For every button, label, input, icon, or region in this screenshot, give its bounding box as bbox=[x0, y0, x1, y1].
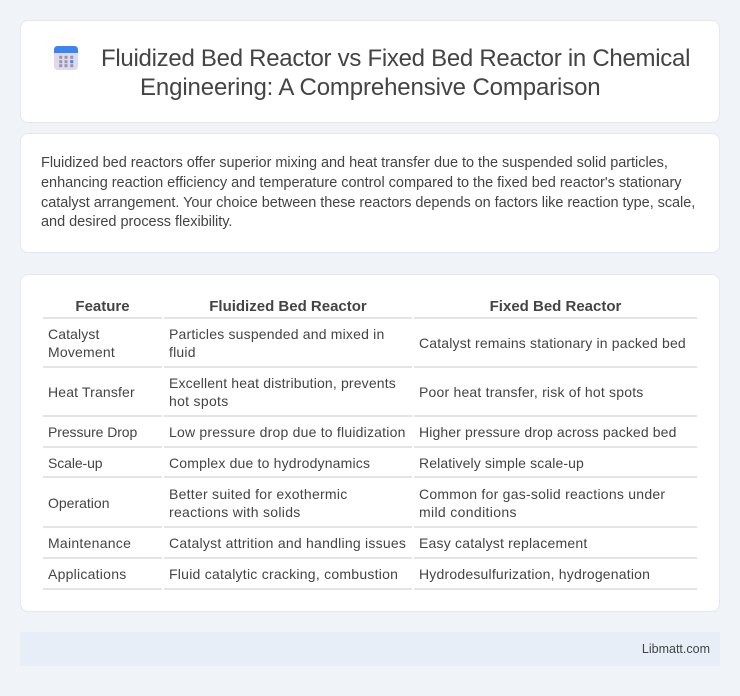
row: Scale-up: Relatively simple scale-up bbox=[419, 455, 584, 471]
row: Pressure Drop bbox=[43, 424, 697, 448]
header row: Fluidized Bed Reactor bbox=[209, 298, 367, 315]
title: Fluidized Bed Reactor vs Fixed Bed Reactor in Chemical bbox=[101, 45, 690, 72]
row: Maintenance: Maintenance bbox=[48, 535, 131, 551]
row: Applications: Hydrodesulfurization, hydrogenation bbox=[419, 566, 650, 582]
row: Catalyst Movement: Catalyst remains stationary in packed bed bbox=[419, 335, 686, 351]
row: Maintenance: Catalyst attrition and handling issues bbox=[169, 535, 406, 551]
row: Applications: Fluid catalytic cracking, combustion bbox=[169, 566, 398, 582]
row: Scale-up: Scale-up bbox=[48, 455, 102, 471]
row: Operation: mild conditions bbox=[419, 504, 517, 520]
row: Pressure Drop: Low pressure drop due to fluidization bbox=[169, 424, 406, 440]
text block: summary: catalyst arrangement. Your choice between these reactors depends on factors like reaction type, scale, bbox=[41, 195, 695, 211]
row: Operation: Better suited for exothermic bbox=[169, 486, 347, 502]
header row: Fixed Bed Reactor bbox=[490, 298, 621, 315]
icon: calendar bbox=[54, 46, 78, 70]
footer text: Libmatt.com bbox=[642, 642, 710, 656]
text block: summary bbox=[41, 155, 695, 230]
row: Applications bbox=[43, 566, 697, 590]
row: Scale-up bbox=[43, 455, 697, 478]
panel: summary card bbox=[20, 133, 720, 253]
row: Catalyst Movement: Movement bbox=[48, 344, 115, 360]
row: Scale-up: Complex due to hydrodynamics bbox=[169, 455, 370, 471]
row: Heat Transfer bbox=[43, 375, 697, 417]
row: Operation: Operation bbox=[48, 495, 109, 511]
row: Pressure Drop: Pressure Drop bbox=[48, 424, 137, 440]
header row: Feature bbox=[75, 298, 130, 315]
row: Pressure Drop: Higher pressure drop across packed bed bbox=[419, 424, 676, 440]
text block: summary: Fluidized bed reactors offer superior mixing and heat transfer due to the suspended solid particles, bbox=[41, 155, 668, 171]
row: Operation: Common for gas-solid reactions under bbox=[419, 486, 665, 502]
row: Catalyst Movement bbox=[43, 326, 697, 368]
row: Catalyst Movement: Particles suspended and mixed in bbox=[169, 326, 384, 342]
text block: summary: and desired process flexibility. bbox=[41, 214, 232, 230]
comparison table bbox=[43, 298, 697, 590]
title: Engineering: A Comprehensive Comparison bbox=[140, 74, 601, 101]
title bbox=[101, 45, 690, 101]
row: Heat Transfer: Excellent heat distribution, prevents bbox=[169, 375, 396, 391]
row: Maintenance: Easy catalyst replacement bbox=[419, 535, 587, 551]
row: Heat Transfer: Heat Transfer bbox=[48, 384, 135, 400]
header row bbox=[43, 298, 697, 319]
row: Operation bbox=[43, 486, 697, 528]
row: Operation: reactions with solids bbox=[169, 504, 301, 520]
row: Catalyst Movement: Catalyst bbox=[48, 326, 100, 342]
row: Heat Transfer: Poor heat transfer, risk of hot spots bbox=[419, 384, 644, 400]
text block: summary: enhancing reaction efficiency and temperature control compared to the fixed bed reactor's stationary bbox=[41, 175, 681, 191]
panel: title card bbox=[20, 20, 720, 123]
row: Heat Transfer: hot spots bbox=[169, 393, 229, 409]
row: Applications: Applications bbox=[48, 566, 126, 582]
row: Catalyst Movement: fluid bbox=[169, 344, 196, 360]
panel: comparison table card bbox=[20, 274, 720, 612]
row: Maintenance bbox=[43, 535, 697, 559]
footer bar bbox=[20, 632, 720, 666]
